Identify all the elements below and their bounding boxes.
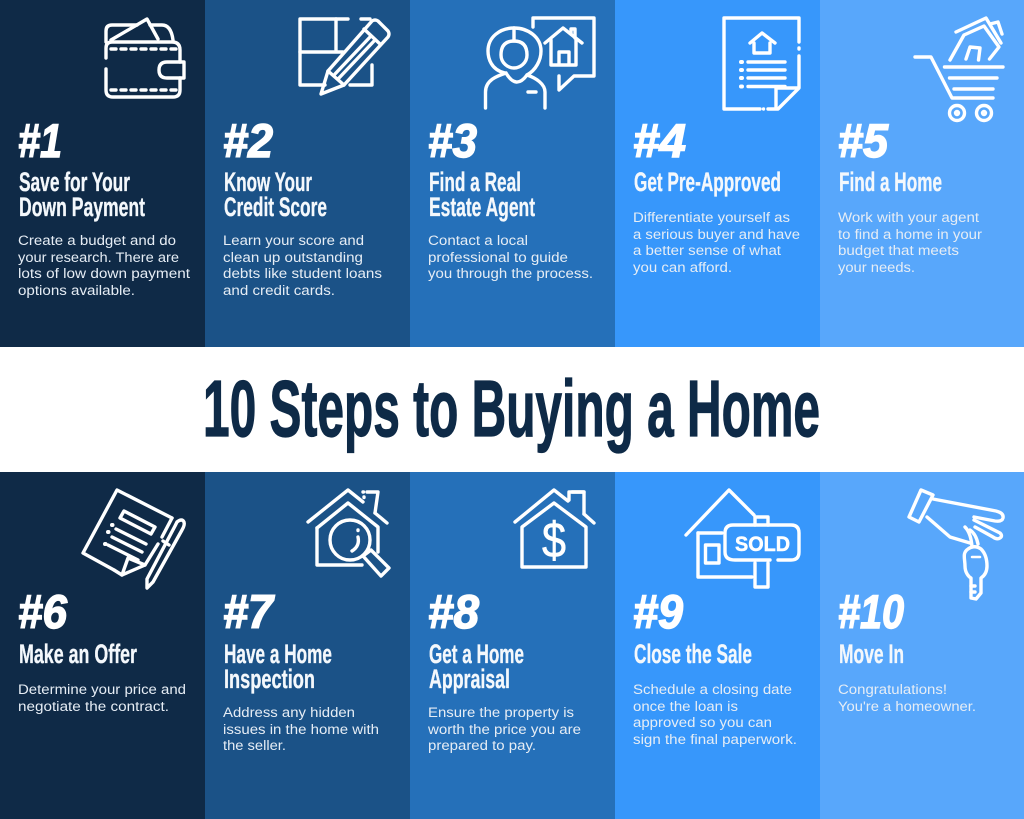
heading: Move In	[839, 639, 904, 669]
description: Differentiate yourself as	[633, 210, 790, 225]
description: professional to guide	[428, 250, 568, 265]
description: debts like student loans	[223, 266, 382, 281]
description: your research. There are	[18, 250, 179, 265]
panel: step 3	[410, 0, 615, 347]
description: a better sense of what	[633, 243, 781, 258]
panel: step 1	[0, 0, 205, 347]
step number: #1	[18, 114, 62, 167]
description	[18, 682, 186, 714]
panel: step 8	[410, 472, 615, 819]
description: approved so you can	[633, 715, 772, 730]
heading	[224, 167, 327, 222]
description: lots of low down payment	[18, 266, 190, 281]
heading: Estate Agent	[429, 192, 535, 222]
description	[223, 705, 379, 753]
heading	[429, 639, 524, 694]
step number: #5	[838, 114, 889, 167]
heading: Get a Home	[429, 639, 524, 669]
panel: step 10	[820, 472, 1024, 819]
description: You're a homeowner.	[838, 699, 976, 714]
description: prepared to pay.	[428, 738, 536, 753]
description	[633, 682, 797, 747]
description: worth the price you are	[427, 722, 581, 737]
heading: Save for Your	[19, 167, 130, 197]
panel: step 9	[615, 472, 820, 819]
icon: house with dollar sign: $	[542, 512, 566, 568]
heading: Credit Score	[224, 192, 327, 222]
description: you can afford.	[633, 260, 732, 275]
panel: step 4	[615, 0, 820, 347]
step number: #9	[633, 585, 683, 638]
icon: house with sold sign	[686, 490, 799, 587]
step number: #7	[223, 585, 275, 638]
description: Congratulations!	[838, 682, 947, 697]
heading: Close the Sale	[634, 639, 752, 669]
icon: agent with speech bubble	[486, 18, 594, 108]
description: Contact a local	[428, 233, 528, 248]
description: options available.	[18, 283, 135, 298]
description: and credit cards.	[223, 283, 335, 298]
icon: house with sold sign: SOLD	[735, 533, 790, 556]
description	[428, 233, 593, 281]
description: clean up outstanding	[223, 250, 363, 265]
heading: Make an Offer	[19, 639, 137, 669]
description	[18, 233, 190, 298]
description: once the loan is	[633, 699, 738, 714]
heading	[224, 639, 332, 694]
heading: Appraisal	[429, 664, 510, 694]
icon: hand holding key	[909, 490, 1003, 599]
panel: step 7	[205, 472, 410, 819]
description: your needs.	[838, 260, 915, 275]
heading: Know Your	[224, 167, 312, 197]
heading: Find a Real	[429, 167, 521, 197]
heading: Down Payment	[19, 192, 145, 222]
icon: shopping cart with house	[915, 18, 1003, 120]
step number: #8	[428, 585, 480, 638]
icon: contract and pen	[83, 490, 184, 588]
description: the seller.	[223, 738, 286, 753]
icon: floor plan and pencil	[300, 19, 389, 94]
description: you through the process.	[428, 266, 593, 281]
icon: house with dollar sign	[515, 490, 594, 568]
description: issues in the home with	[223, 722, 379, 737]
description: Work with your agent	[838, 210, 979, 225]
icon: house with magnifying glass	[308, 490, 389, 576]
heading: Have a Home	[224, 639, 332, 669]
panel: step 2	[205, 0, 410, 347]
step number: #10	[838, 585, 904, 638]
description: negotiate the contract.	[18, 699, 169, 714]
heading: Get Pre-Approved	[634, 167, 781, 197]
panel: step 6	[0, 472, 205, 819]
description	[633, 210, 800, 275]
title band	[0, 347, 1024, 472]
description: Learn your score and	[223, 233, 364, 248]
description: budget that meets	[838, 243, 959, 258]
heading	[429, 167, 535, 222]
panel: step 5	[820, 0, 1024, 347]
heading: Inspection	[224, 664, 315, 694]
description: sign the final paperwork.	[633, 732, 797, 747]
description	[223, 233, 382, 298]
description	[838, 210, 983, 275]
heading: Find a Home	[839, 167, 942, 197]
description: Address any hidden	[223, 705, 355, 720]
step number: #4	[633, 114, 686, 167]
step number: #6	[18, 585, 68, 638]
description: Schedule a closing date	[633, 682, 792, 697]
heading	[19, 167, 145, 222]
description: a serious buyer and have	[633, 227, 800, 242]
description: Determine your price and	[18, 682, 186, 697]
description	[838, 682, 976, 714]
description: Create a budget and do	[18, 233, 176, 248]
description: to find a home in your	[838, 227, 983, 242]
step number: #3	[428, 114, 477, 167]
step number: #2	[223, 114, 273, 167]
description	[427, 705, 581, 753]
icon: pre-approval document	[724, 18, 799, 109]
description: Ensure the property is	[428, 705, 574, 720]
icon: wallet	[106, 19, 184, 97]
